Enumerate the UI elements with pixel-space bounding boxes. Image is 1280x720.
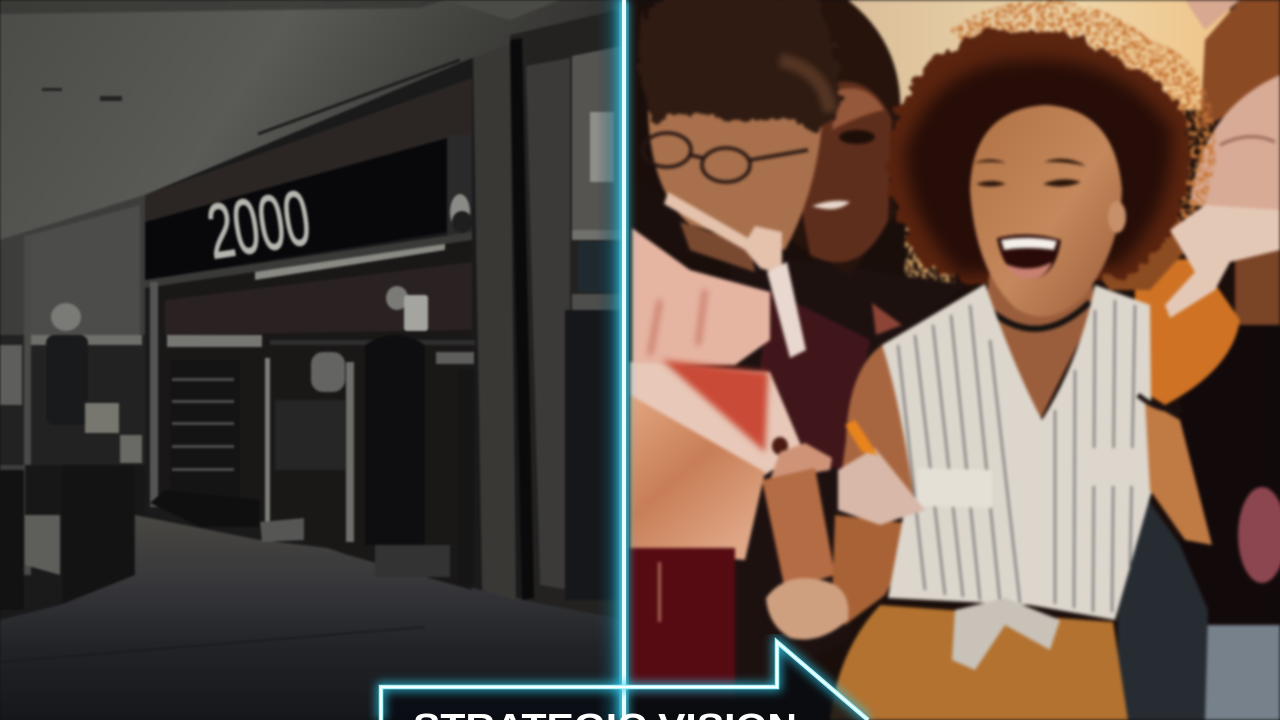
- shirt knot: [952, 598, 1060, 670]
- store sign: [145, 138, 447, 280]
- panel: grayscale storefront: [0, 0, 626, 720]
- woman: afro speckle halo: [950, 0, 1215, 240]
- woman: skirt: [830, 605, 1128, 720]
- woman: face: [970, 105, 1122, 316]
- red shirt: [630, 548, 735, 698]
- man: hair highlight: [780, 60, 830, 112]
- bracelet: [1138, 395, 1182, 410]
- woman: choker: [992, 302, 1090, 329]
- column: [473, 44, 516, 600]
- hair gap highlight: [905, 225, 955, 285]
- forearm: [762, 468, 835, 590]
- neon divider line: [596, 0, 628, 720]
- person: pink sleeve right: [1180, 0, 1280, 720]
- jacket: orange: [1132, 259, 1240, 405]
- jeans: [1118, 500, 1208, 720]
- left window: [0, 195, 145, 610]
- flame highlight: [845, 420, 878, 455]
- door: [510, 8, 626, 620]
- woman: ear: [1108, 201, 1126, 233]
- shoulder: brown: [1090, 205, 1195, 290]
- woman: eyes and brows: [974, 159, 1086, 187]
- woman: forearm: [832, 515, 922, 625]
- store window: [145, 232, 475, 590]
- hand: finger gaps: [650, 290, 705, 355]
- man: torso dark: [730, 250, 965, 690]
- white strap: [767, 262, 806, 358]
- right hand: [1165, 205, 1280, 318]
- neon label frame: [381, 642, 868, 720]
- ceiling lights: [42, 88, 122, 101]
- ceiling: [0, 0, 626, 240]
- woman: mouth: [997, 234, 1061, 279]
- hand: [632, 228, 770, 365]
- woman: left arm: [838, 345, 915, 505]
- woman: afro: [888, 29, 1192, 285]
- woman: shirt: [882, 284, 1152, 620]
- warm sky: [830, 0, 1230, 110]
- man: sleeve: [630, 360, 832, 560]
- sign text 2000: 2000: [202, 173, 316, 276]
- man: glasses: [643, 133, 808, 182]
- man: face: [648, 100, 822, 250]
- woman: afro core: [905, 60, 1172, 275]
- woman: neck: [985, 260, 1095, 420]
- man: hair: [640, 0, 840, 132]
- panel: colour photo of friends: [626, 0, 1280, 720]
- floor: [0, 515, 626, 720]
- panel: label shape: [381, 642, 868, 720]
- second woman: head: [790, 0, 900, 275]
- woman: right arm: [1145, 400, 1212, 545]
- woman: hand on arm: [838, 448, 925, 525]
- fist: [766, 578, 848, 640]
- sign band: [145, 78, 472, 225]
- man: scarf: [634, 180, 755, 270]
